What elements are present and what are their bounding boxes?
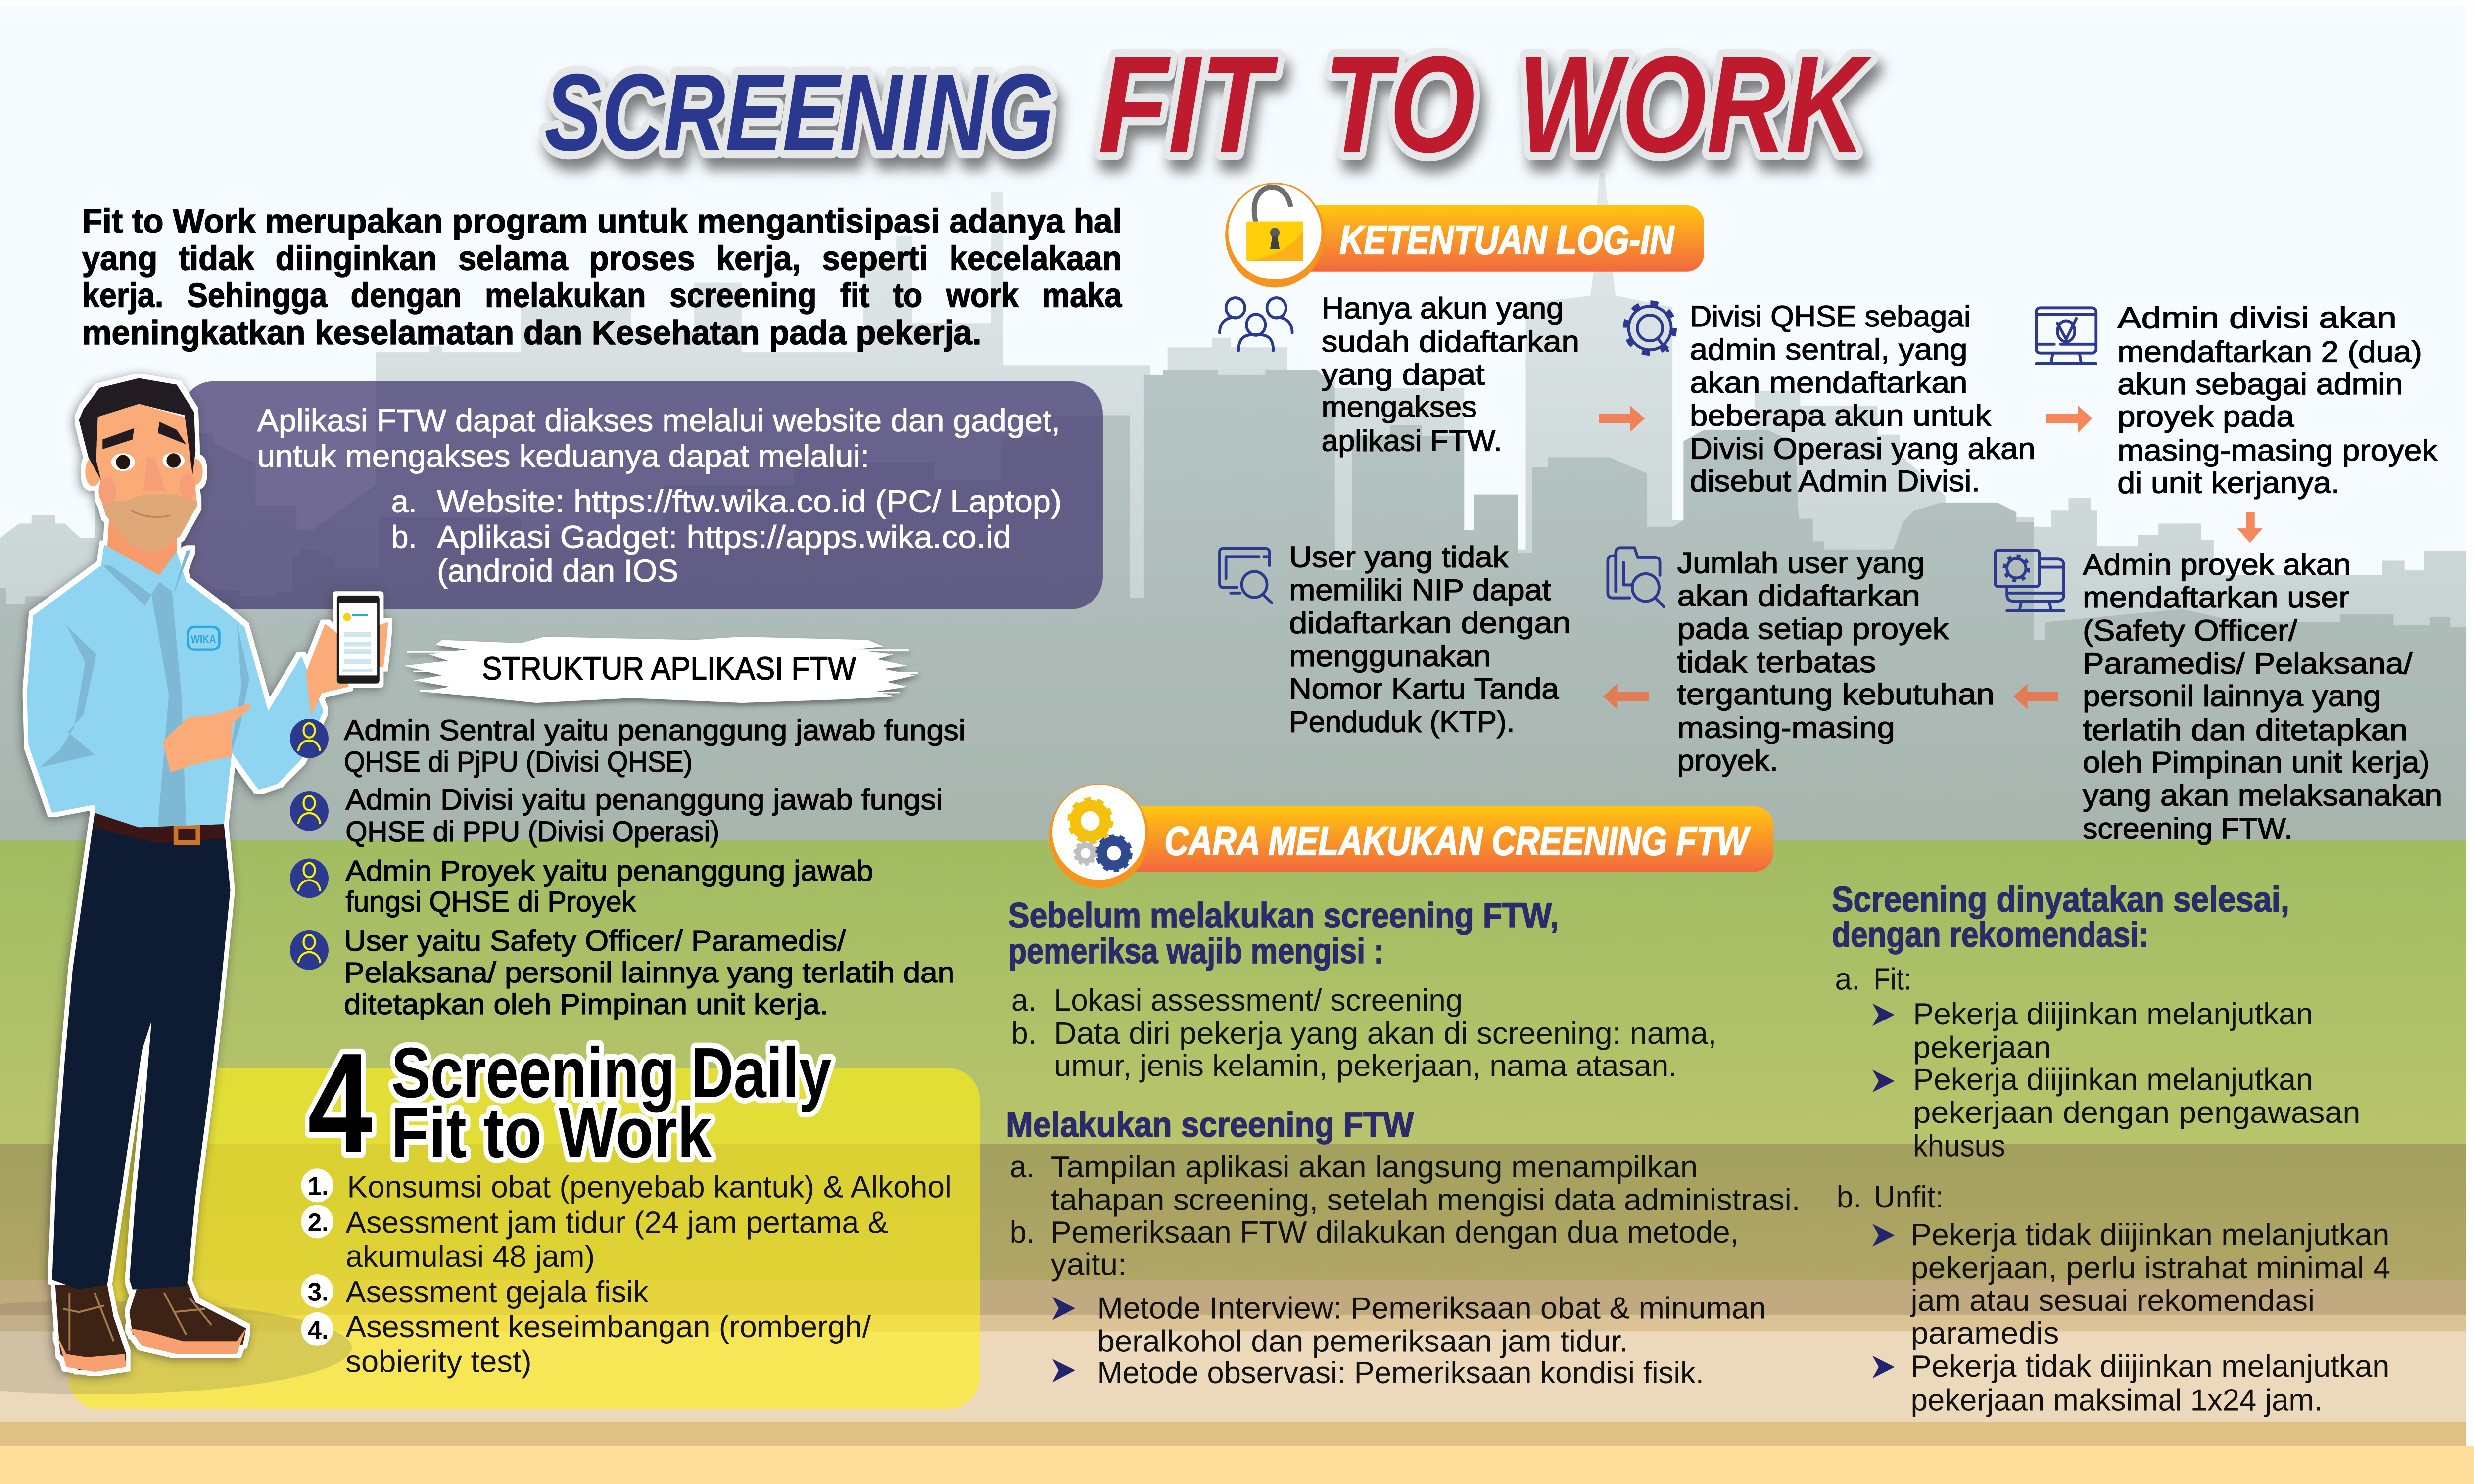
icon: gears xyxy=(1070,800,1131,870)
heading: struktur aplikasi: STRUKTUR APLIKASI FTW xyxy=(482,650,856,687)
icon: monitor with check xyxy=(2036,308,2096,364)
list: data to fill in: b. xyxy=(1011,1016,1037,1050)
number badge 4 xyxy=(301,1312,333,1346)
intro paragraph: kerja. Sehingga dengan melakukan screening fit to work maka xyxy=(82,277,1122,315)
step 6 text: User yang tidak xyxy=(1289,540,1509,574)
beard shade xyxy=(101,495,197,553)
heading: sebelum melakukan screening: Sebelum melakukan screening FTW, xyxy=(1008,896,1559,935)
number badge 2 xyxy=(301,1205,333,1238)
section header: ketentuan log-in: KETENTUAN LOG-IN xyxy=(1339,218,1675,263)
step 6 text: menggunakan xyxy=(1289,639,1491,673)
panel text: access info: untuk mengakses keduanya dapat melalui: xyxy=(257,439,869,474)
number badge 3: 3. xyxy=(308,1277,329,1306)
step 4 text: (Safety Officer/ xyxy=(2083,614,2297,647)
step 2 text: akan mendaftarkan xyxy=(1690,366,1967,399)
list: unfit: jam atau sesuai rekomendasi xyxy=(1910,1283,2315,1317)
role: admin sentral xyxy=(344,714,966,778)
item 4 text xyxy=(345,1309,871,1378)
ground: dark band xyxy=(0,1144,2466,1280)
pointing hand xyxy=(162,703,251,772)
item 3 text: Asessment gejala fisik xyxy=(345,1274,649,1309)
step 1 text: sudah didaftarkan xyxy=(1322,325,1579,358)
panel: yellow screening daily background xyxy=(68,1068,980,1409)
illustration: man with phone xyxy=(27,378,388,1372)
text block: screening result recommendation xyxy=(1832,880,2390,1417)
list: unfit: b. xyxy=(1837,1179,1861,1214)
phone xyxy=(337,596,380,684)
list: fit: Pekerja diijinkan melanjutkan xyxy=(1913,1062,2313,1097)
title: FIT xyxy=(1098,28,1279,182)
eyes xyxy=(111,453,185,471)
step 2 text: disebut Admin Divisi. xyxy=(1690,464,1980,498)
icon: user badge 2 xyxy=(290,791,329,831)
panel text: access info: Aplikasi FTW dapat diakses melalui website dan gadget, xyxy=(257,403,1060,438)
step 3 text: akun sebagai admin xyxy=(2117,367,2403,401)
background skyline: far buildings xyxy=(0,173,2466,843)
text block: sebelum screening xyxy=(1008,896,1716,1083)
step 4 text xyxy=(2083,548,2442,845)
step 2 text: admin sentral, yang xyxy=(1690,332,1967,366)
icon: folder with magnifier xyxy=(1608,548,1664,607)
step 6 text: Nomor Kartu Tanda xyxy=(1289,672,1559,705)
list: fit: Fit: xyxy=(1874,962,1911,996)
role: admin sentral: QHSE di PjPU (Divisi QHSE) xyxy=(344,745,693,778)
step 5 text: pada setiap proyek xyxy=(1677,612,1949,646)
title xyxy=(544,28,1873,182)
step 2 text: beberapa akun untuk xyxy=(1690,399,1991,432)
heading: 4 screening daily xyxy=(308,1024,831,1183)
item 2 text xyxy=(345,1205,888,1273)
step 2 text xyxy=(1690,299,2036,498)
step 6 text: memiliki NIP dapat xyxy=(1289,573,1551,606)
panel: application access xyxy=(182,381,1103,609)
list: unfit: Pekerja tidak diijinkan melanjutkan xyxy=(1911,1348,2389,1383)
list: data to fill in: Lokasi assessment/ screening xyxy=(1054,983,1463,1017)
panel text: access info: (android dan IOS xyxy=(437,554,678,589)
step 6 text: Penduduk (KTP). xyxy=(1289,705,1515,739)
step 1 text: aplikasi FTW. xyxy=(1322,424,1502,458)
list: screening steps: yaitu: xyxy=(1051,1247,1127,1281)
step 4 text: Admin proyek akan xyxy=(2083,548,2351,581)
shirt xyxy=(27,545,324,827)
belt xyxy=(95,813,224,845)
step 3 text: proyek pada xyxy=(2117,400,2294,433)
list: unfit xyxy=(1837,1179,2390,1417)
panel text: access info xyxy=(257,403,1062,589)
number badge 1: 1. xyxy=(308,1171,329,1201)
heading: 4 screening daily: 4 xyxy=(308,1024,373,1183)
step 5 text: masing-masing xyxy=(1677,711,1895,744)
item 4 text: sobierity test) xyxy=(345,1344,532,1378)
cheeks and nose xyxy=(98,457,195,505)
step 4 text: oleh Pimpinan unit kerja) xyxy=(2083,745,2430,779)
list: unfit: Unfit: xyxy=(1874,1179,1944,1214)
step 5 text: tidak terbatas xyxy=(1677,645,1876,679)
step 5 text xyxy=(1677,546,1995,777)
list: four screening items xyxy=(301,1168,952,1378)
shirt logo: WIKA xyxy=(191,633,216,646)
intro paragraph: Fit to Work merupakan program untuk mengantisipasi adanya hal xyxy=(82,203,1122,240)
text block: melakukan screening xyxy=(1006,1105,1800,1390)
step 4 text: yang akan melaksanakan xyxy=(2083,779,2442,812)
step 2 text: Divisi QHSE sebagai xyxy=(1690,299,1971,333)
heading: 4 screening daily: Screening Daily xyxy=(391,1033,831,1113)
heading: 4 screening daily: Fit to Work xyxy=(391,1093,712,1172)
section header: ketentuan log-in xyxy=(1225,183,1704,287)
section header: cara melakukan screening: CARA MELAKUKAN CREENING FTW xyxy=(1164,819,1751,864)
background sky xyxy=(0,6,2466,847)
list: data to fill in: umur, jenis kelamin, pekerjaan, nama atasan. xyxy=(1054,1048,1677,1083)
arrow: step 1 to 2 xyxy=(1599,406,1645,432)
background skyline: near buildings xyxy=(0,370,2466,843)
heading: sebelum melakukan screening xyxy=(1008,896,1559,971)
panel text: access info: b. xyxy=(391,520,417,555)
step 3 text xyxy=(2117,301,2438,499)
title: TO xyxy=(1324,28,1475,182)
list: screening steps: b. xyxy=(1010,1214,1035,1249)
role: user: ditetapkan oleh Pimpinan unit kerja. xyxy=(344,988,828,1020)
list: data to fill in: a. xyxy=(1011,983,1037,1017)
panel text: access info: Website: https://ftw.wika.co.id (PC/ Laptop) xyxy=(437,484,1062,519)
heading: screening dinyatakan selesai: dengan rekomendasi: xyxy=(1832,915,2149,955)
step 3 text: mendaftarkan 2 (dua) xyxy=(2117,335,2422,369)
list: screening steps: a. xyxy=(1010,1149,1035,1184)
number badge 2: 2. xyxy=(308,1208,329,1237)
role: admin divisi: Admin Divisi yaitu penanggung jawab fungsi xyxy=(345,784,943,816)
title: WORK xyxy=(1518,28,1873,182)
role: admin proyek: fungsi QHSE di Proyek xyxy=(345,885,636,918)
panel text: access info: a. xyxy=(391,484,417,519)
list: screening steps: Tampilan aplikasi akan langsung menampilkan xyxy=(1051,1149,1698,1184)
face xyxy=(96,404,197,553)
mouth xyxy=(131,510,170,517)
ground shadow under figure xyxy=(0,1301,352,1394)
list: unfit: paramedis xyxy=(1911,1315,2059,1350)
step 3 text: di unit kerjanya. xyxy=(2117,466,2340,499)
role: admin proyek: Admin Proyek yaitu penanggung jawab xyxy=(345,855,873,887)
heading: melakukan screening: Melakukan screening FTW xyxy=(1006,1105,1414,1145)
icon: open padlock xyxy=(1246,187,1303,261)
step 2 text: Divisi Operasi yang akan xyxy=(1690,432,2036,465)
step 5 text: akan didaftarkan xyxy=(1677,579,1920,612)
arrow: step 2 to 3 xyxy=(2046,406,2092,433)
icon: user badge 3 xyxy=(290,859,329,898)
list: unfit: pekerjaan maksimal 1x24 jam. xyxy=(1911,1383,2323,1417)
holding hand xyxy=(306,622,388,716)
list: screening steps: beralkohol dan pemeriksaan jam tidur. xyxy=(1097,1324,1628,1358)
list: fit: pekerjaan dengan pengawasan xyxy=(1913,1095,2360,1129)
arrow: step 4 to 5 xyxy=(2013,684,2058,709)
shirt logo xyxy=(188,627,219,649)
intro paragraph xyxy=(82,203,1122,352)
list: unfit: pekerjaan, perlu istrahat minimal 4 xyxy=(1911,1250,2390,1285)
item 1 text: Konsumsi obat (penyebab kantuk) & Alkohol xyxy=(347,1169,952,1204)
intro paragraph: yang tidak diinginkan selama proses kerja, seperti kecelakaan xyxy=(82,240,1122,278)
step 1 text: mengakses xyxy=(1322,390,1477,423)
icon: monitor with magnifier xyxy=(1220,549,1272,603)
icon: three people xyxy=(1220,298,1292,351)
ground: sand bands xyxy=(0,1280,2474,1484)
list: unfit: Pekerja tidak diijinkan melanjutkan xyxy=(1911,1217,2389,1252)
ground: grass xyxy=(0,840,2466,1144)
role: admin divisi xyxy=(345,784,943,848)
role: user xyxy=(344,925,954,1020)
list: struktur aplikasi roles xyxy=(290,714,966,1020)
title: SCREENING xyxy=(544,50,1054,174)
icon: user badge 4 xyxy=(290,930,329,970)
section header: cara melakukan screening xyxy=(1049,784,1773,888)
role: admin proyek xyxy=(345,855,873,918)
item 2 text: Asessment jam tidur (24 jam pertama & xyxy=(345,1205,888,1240)
icon: monitor with gear xyxy=(1995,550,2064,611)
icon: gear with magnifier xyxy=(1625,303,1674,353)
list: fit: pekerjaan xyxy=(1913,1030,2051,1064)
step 5 text: proyek. xyxy=(1677,743,1778,777)
role: user: Pelaksana/ personil lainnya yang terlatih dan xyxy=(344,956,954,989)
item 4 text: Asessment keseimbangan (rombergh/ xyxy=(345,1309,871,1344)
eyebrows xyxy=(102,422,186,449)
step 1 text: Hanya akun yang xyxy=(1322,291,1564,325)
number badge 3 xyxy=(301,1274,333,1308)
step 4 text: mendaftarkan user xyxy=(2083,581,2349,614)
role: admin sentral: Admin Sentral yaitu penanggung jawab fungsi xyxy=(344,714,966,746)
role: admin divisi: QHSE di PPU (Divisi Operasi) xyxy=(345,815,719,848)
list: data to fill in: Data diri pekerja yang akan di screening: nama, xyxy=(1054,1016,1716,1050)
shirt folds and tie placket xyxy=(40,550,249,826)
heading: sebelum melakukan screening: pemeriksa wajib mengisi : xyxy=(1008,931,1384,971)
ears xyxy=(85,457,203,486)
list: fit xyxy=(1835,962,2360,1163)
item 2 text: akumulasi 48 jam) xyxy=(345,1239,595,1273)
step 4 text: personil lainnya yang xyxy=(2083,679,2381,713)
role: user: User yaitu Safety Officer/ Paramedis/ xyxy=(344,925,846,957)
list: data to fill in xyxy=(1011,983,1716,1083)
heading: screening dinyatakan selesai: Screening dinyatakan selesai, xyxy=(1832,880,2289,920)
list: screening steps: Metode observasi: Pemeriksaan kondisi fisik. xyxy=(1097,1355,1704,1390)
step 1 text xyxy=(1322,291,1579,458)
intro paragraph: meningkatkan keselamatan dan Kesehatan pada pekerja. xyxy=(82,314,981,352)
step 4 text: terlatih dan ditetapkan xyxy=(2083,713,2408,746)
step 6 text: didaftarkan dengan xyxy=(1289,606,1570,640)
number badge 4: 4. xyxy=(308,1315,329,1344)
list: fit: khusus xyxy=(1913,1128,2005,1163)
step 4 text: Paramedis/ Pelaksana/ xyxy=(2083,647,2413,680)
step 3 text: Admin divisi akan xyxy=(2117,301,2397,334)
list: fit: a. xyxy=(1835,962,1860,996)
heading: screening dinyatakan selesai xyxy=(1832,880,2289,955)
arrow: step 3 to 4 xyxy=(2237,512,2263,543)
hair xyxy=(79,378,195,480)
list: fit: Pekerja diijinkan melanjutkan xyxy=(1913,996,2313,1031)
list: screening steps: Pemeriksaan FTW dilakukan dengan dua metode, xyxy=(1051,1214,1739,1249)
step 3 text: masing-masing proyek xyxy=(2117,433,2438,467)
arrow: step 5 to 6 xyxy=(1603,684,1649,709)
step 4 text: screening FTW. xyxy=(2083,812,2292,845)
step 5 text: Jumlah user yang xyxy=(1677,546,1925,579)
list: screening steps xyxy=(1010,1149,1800,1390)
neck xyxy=(107,520,177,578)
brush stroke background xyxy=(404,637,918,703)
heading: struktur aplikasi xyxy=(404,637,918,703)
step 6 text xyxy=(1289,540,1570,739)
list: screening steps: Metode Interview: Pemeriksaan obat & minuman xyxy=(1097,1291,1766,1325)
step 1 text: yang dapat xyxy=(1322,358,1485,391)
shoes xyxy=(55,1280,246,1372)
number badge 1 xyxy=(301,1168,333,1202)
list: screening steps: tahapan screening, setelah mengisi data administrasi. xyxy=(1051,1182,1800,1217)
panel text: access info: Aplikasi Gadget: https://apps.wika.co.id xyxy=(437,520,1011,555)
trousers xyxy=(52,813,231,1290)
icon: user badge 1 xyxy=(290,719,329,758)
step 5 text: tergantung kebutuhan xyxy=(1677,678,1995,711)
